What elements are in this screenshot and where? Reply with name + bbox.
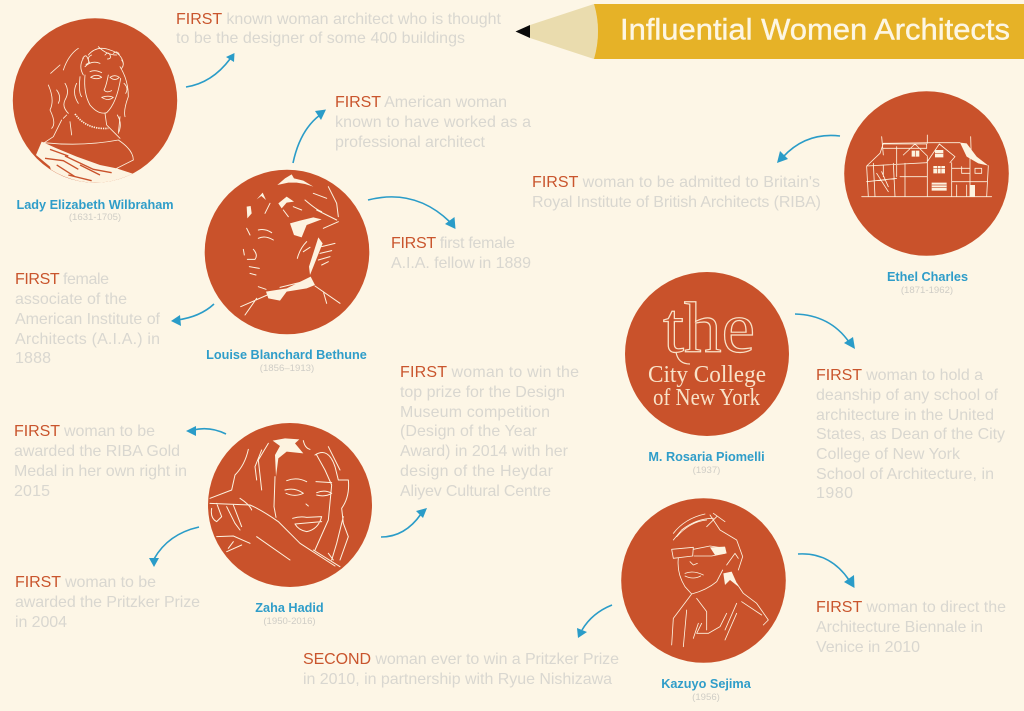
pencil wood tip <box>530 4 598 59</box>
fact text: awarded the Pritzker Prize <box>15 594 200 611</box>
fact text: 1888 <box>15 350 51 367</box>
fact text: design of the Heydar <box>400 463 554 480</box>
arrow <box>186 426 226 436</box>
title: Influential Women Architects <box>620 14 1010 46</box>
portrait circle <box>208 423 372 587</box>
fact text: Venice in 2010 <box>816 639 920 656</box>
panel: M. Rosaria Piomelli <box>625 272 789 476</box>
fact text: in 2010, in partnership with Ryue Nishizawa <box>303 671 612 688</box>
fact text: FIRST known woman architect who is thought <box>176 11 502 28</box>
arrow <box>381 508 427 537</box>
fact text: Aliyev Cultural Centre <box>400 483 551 500</box>
dates: (1950-2016) <box>263 616 316 627</box>
fact text <box>15 574 200 631</box>
fact text: FIRST female <box>15 271 109 288</box>
name: Ethel Charles <box>887 270 968 284</box>
fact text <box>816 367 1005 502</box>
pencil lead <box>516 25 530 38</box>
banner body <box>594 4 1024 59</box>
fact text: FIRST first female <box>391 235 515 252</box>
arrow <box>577 605 612 638</box>
fact text: FIRST woman to direct the <box>816 599 1006 616</box>
portrait sketch <box>241 174 340 315</box>
fact text: School of Architecture, in <box>816 466 994 483</box>
fact text: Medal in her own right in <box>14 463 187 480</box>
fact text <box>816 599 1006 656</box>
fact text: associate of the <box>15 291 127 308</box>
fact text: (Design of the Year <box>400 423 538 440</box>
logo words: City College: City College <box>648 362 766 388</box>
panel: Lady Elizabeth Wilbraham <box>13 18 177 223</box>
arrow <box>777 135 840 163</box>
fact text <box>14 423 187 500</box>
fact text: in 2004 <box>15 614 67 631</box>
panel: Kazuyo Sejima <box>621 498 786 703</box>
fact text <box>15 271 161 367</box>
fact text: Royal Institute of British Architects (RIBA) <box>532 194 821 211</box>
arrow <box>293 110 326 163</box>
fact text: Museum competition <box>400 404 550 421</box>
name: Zaha Hadid <box>255 601 324 615</box>
dates: (1871-1962) <box>901 285 953 296</box>
logo word: the: the <box>663 288 755 368</box>
portrait sketch <box>672 513 768 647</box>
portrait circle <box>621 498 786 663</box>
fact text: States, as Dean of the City <box>816 426 1005 443</box>
City College logo <box>648 288 766 411</box>
fact text: FIRST woman to be admitted to Britain's <box>532 174 820 191</box>
fact text: architecture in the United <box>816 407 994 424</box>
name: Kazuyo Sejima <box>661 677 752 691</box>
portrait sketch <box>210 438 349 567</box>
arrow <box>798 554 854 588</box>
panel: Louise Blanchard Bethune <box>205 170 369 374</box>
fact text: Architects (A.I.A.) in <box>15 331 160 348</box>
dates: (1856–1913) <box>260 363 314 374</box>
fact text: FIRST woman to be <box>15 574 156 591</box>
name: Lady Elizabeth Wilbraham <box>16 198 174 212</box>
fact text: College of New York <box>816 446 961 463</box>
pencil title banner <box>516 4 1024 59</box>
fact text <box>303 651 619 688</box>
fact text: American Institute of <box>15 311 161 328</box>
fact text: deanship of any school of <box>816 387 999 404</box>
portrait sketch <box>36 47 137 185</box>
fact text: 2015 <box>14 483 50 500</box>
arrow <box>171 304 214 326</box>
portrait circle <box>205 170 369 334</box>
fact text <box>400 364 579 500</box>
fact text: to be the designer of some 400 buildings <box>176 30 465 47</box>
logo t tail <box>676 352 690 364</box>
name: M. Rosaria Piomelli <box>648 450 765 464</box>
fact text <box>391 235 531 272</box>
panel: Zaha Hadid <box>208 423 372 627</box>
fact text: A.I.A. fellow in 1889 <box>391 255 531 272</box>
portrait circle <box>844 91 1009 256</box>
arrow <box>368 197 456 229</box>
dates: (1937) <box>693 465 720 476</box>
name: Louise Blanchard Bethune <box>206 348 367 362</box>
panel: Ethel Charles <box>844 91 1009 296</box>
fact text: Award) in 2014 with her <box>400 443 569 460</box>
arrow <box>795 314 855 349</box>
portrait circle <box>13 18 177 183</box>
fact text <box>335 94 531 151</box>
fact text: FIRST American woman <box>335 94 507 111</box>
fact text: awarded the RIBA Gold <box>14 443 180 460</box>
fact text: FIRST woman to win the <box>400 364 579 381</box>
fact text: top prize for the Design <box>400 384 565 401</box>
fact text <box>532 174 821 211</box>
fact text: professional architect <box>335 134 486 151</box>
fact text: known to have worked as a <box>335 114 531 131</box>
portrait circle <box>625 272 789 436</box>
fact text: Architecture Biennale in <box>816 619 983 636</box>
dates: (1956) <box>692 692 720 703</box>
house drawing <box>862 135 992 197</box>
logo words: of New York: of New York <box>653 385 760 411</box>
fact text: 1980 <box>816 485 853 502</box>
fact text: FIRST woman to be <box>14 423 155 440</box>
arrow <box>149 527 199 567</box>
fact text <box>176 11 502 47</box>
arrow <box>186 53 234 87</box>
dates: (1631-1705) <box>69 212 121 223</box>
fact text: FIRST woman to hold a <box>816 367 983 384</box>
fact text: SECOND woman ever to win a Pritzker Prize <box>303 651 619 668</box>
